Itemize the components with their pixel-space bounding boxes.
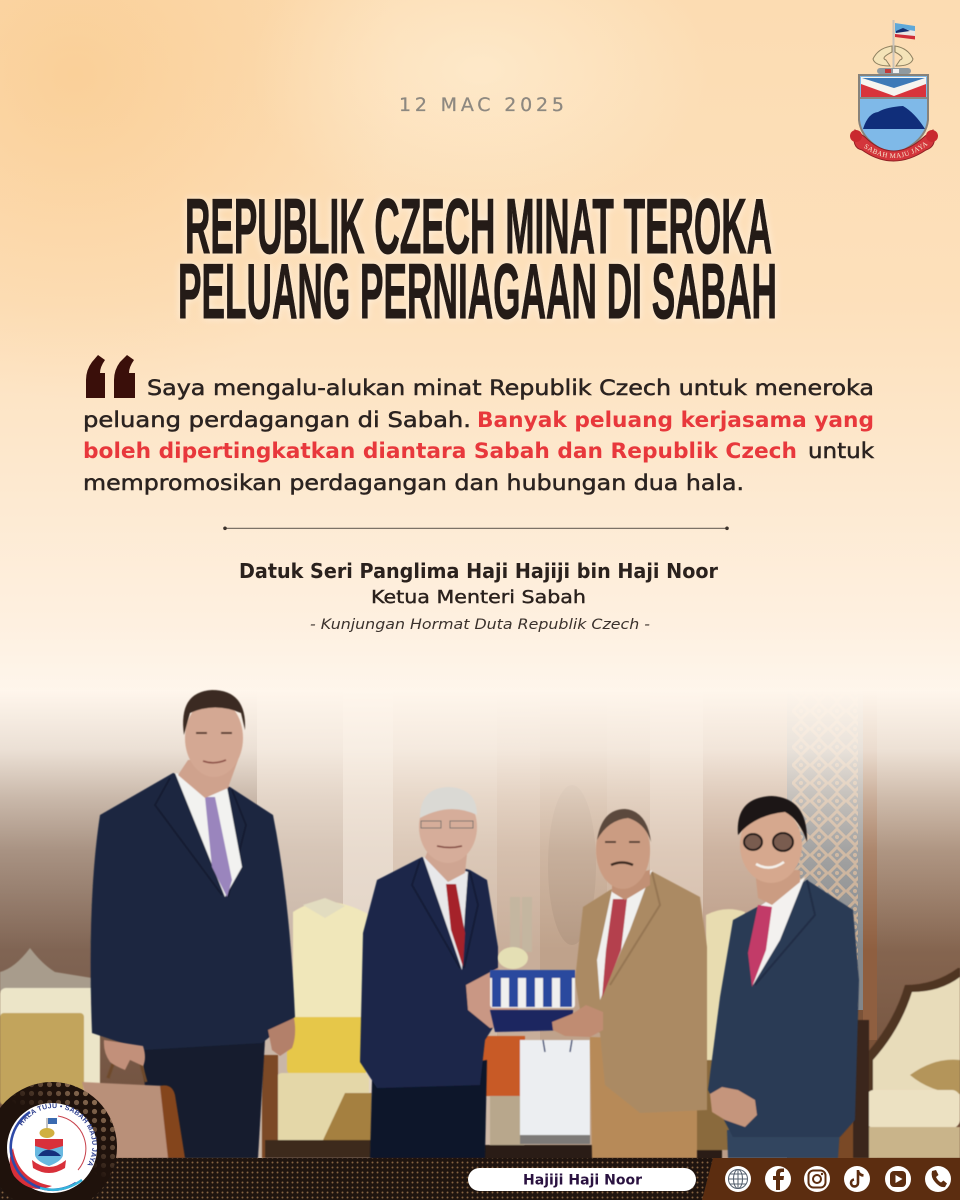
ring swoosh <box>10 1148 52 1189</box>
trousers <box>142 1040 265 1158</box>
man 3 <box>490 809 707 1158</box>
trousers <box>727 1130 840 1158</box>
right sofa <box>835 968 960 1160</box>
attribution: - Kunjungan Hormat Duta Republik Czech - <box>310 617 650 633</box>
features <box>196 732 232 734</box>
carpet and table <box>372 1036 722 1159</box>
features <box>605 841 640 843</box>
arms holding flag <box>873 46 913 66</box>
neck <box>755 870 800 905</box>
lapels <box>155 778 246 897</box>
trousers <box>590 1037 697 1158</box>
name pill <box>468 1168 696 1191</box>
wreath <box>877 68 911 74</box>
lapels <box>412 860 478 968</box>
shield <box>859 75 928 155</box>
gift bag <box>520 1040 590 1144</box>
purple tie <box>205 797 232 897</box>
icon: phone <box>925 1166 951 1192</box>
flag <box>892 20 915 70</box>
neck <box>425 845 468 882</box>
pink tie <box>602 899 627 998</box>
jacket <box>360 857 498 1088</box>
man 2 <box>360 787 518 1158</box>
photo: wall background <box>0 690 960 1160</box>
quote text: Banyak peluang kerjasama yang <box>477 408 874 432</box>
glasses and mouth <box>421 821 473 828</box>
name pill: Hajiji Haji Noor <box>523 1172 642 1188</box>
gift box <box>490 970 575 1008</box>
ornate wall panel <box>787 690 863 1010</box>
left sofa <box>0 948 100 1105</box>
hands <box>552 1005 603 1037</box>
side table behind man 4 <box>695 1060 735 1150</box>
vases <box>510 897 532 952</box>
jacket <box>91 773 295 1050</box>
neck <box>612 870 650 900</box>
face <box>740 807 802 883</box>
man 4 <box>708 796 859 1158</box>
briefcase <box>82 1064 185 1158</box>
footer band: brown section <box>702 1158 960 1200</box>
footer band: dotted section <box>0 1158 716 1200</box>
icon: facebook <box>765 1166 791 1192</box>
icon: youtube <box>885 1166 911 1192</box>
ring text: HALA TUJU • SABAH MAJU JAYA <box>18 1103 98 1166</box>
hair <box>420 787 477 818</box>
attribution: Ketua Menteri Sabah <box>371 587 586 608</box>
gift box base <box>490 1010 573 1032</box>
quote text: mempromosikan perdagangan dan hubungan dua hala. <box>83 471 744 496</box>
attribution <box>239 559 718 633</box>
divider <box>223 526 729 530</box>
trousers <box>370 1060 487 1158</box>
face <box>419 791 477 863</box>
glasses and smile <box>744 833 793 851</box>
jacket <box>575 872 707 1113</box>
ribbon: SABAH MAJU JAYA <box>864 142 928 158</box>
hands <box>710 1087 757 1127</box>
hair <box>738 796 807 842</box>
shirt <box>753 877 805 985</box>
neck <box>178 760 238 798</box>
photo: furniture <box>0 897 960 1160</box>
shirt <box>597 870 652 1000</box>
pink tie <box>748 905 772 987</box>
man 1 left hand <box>104 1040 145 1070</box>
attribution: Datuk Seri Panglima Haji Hajiji bin Haji Noor <box>239 559 718 583</box>
title <box>178 182 777 335</box>
shirt <box>423 857 468 970</box>
sofa between men <box>706 909 745 1060</box>
lapel <box>610 872 660 985</box>
face <box>596 811 650 889</box>
lapel <box>755 880 815 985</box>
quote text: untuk <box>808 439 875 464</box>
quote mark <box>86 355 135 398</box>
quote text: Saya mengalu-alukan minat Republik Czech untuk meneroka <box>147 376 874 401</box>
hair <box>597 809 651 842</box>
quote text: peluang perdagangan di Sabah. <box>83 408 471 433</box>
man 1 <box>91 690 295 1158</box>
logo badge: Hala Tuju <box>0 1082 117 1198</box>
centre sofa <box>262 898 375 1158</box>
hair <box>183 690 245 735</box>
shirt <box>175 773 242 897</box>
flowers on gift <box>498 947 528 969</box>
icon: instagram <box>804 1166 830 1192</box>
date: 12 MAC 2025 <box>399 94 564 116</box>
face <box>185 699 243 777</box>
right hand <box>268 1018 295 1056</box>
icon: tiktok <box>844 1166 870 1192</box>
jacket <box>708 880 859 1137</box>
quote text <box>83 376 875 496</box>
hands <box>466 968 518 1028</box>
quote text: boleh dipertingkatkan diantara Sabah dan Republik Czech <box>83 439 797 463</box>
red tie <box>446 884 465 967</box>
icon: website <box>725 1166 751 1192</box>
ribbon <box>850 129 938 162</box>
small shield <box>32 1118 66 1173</box>
coat of arms of Sabah <box>850 20 938 162</box>
